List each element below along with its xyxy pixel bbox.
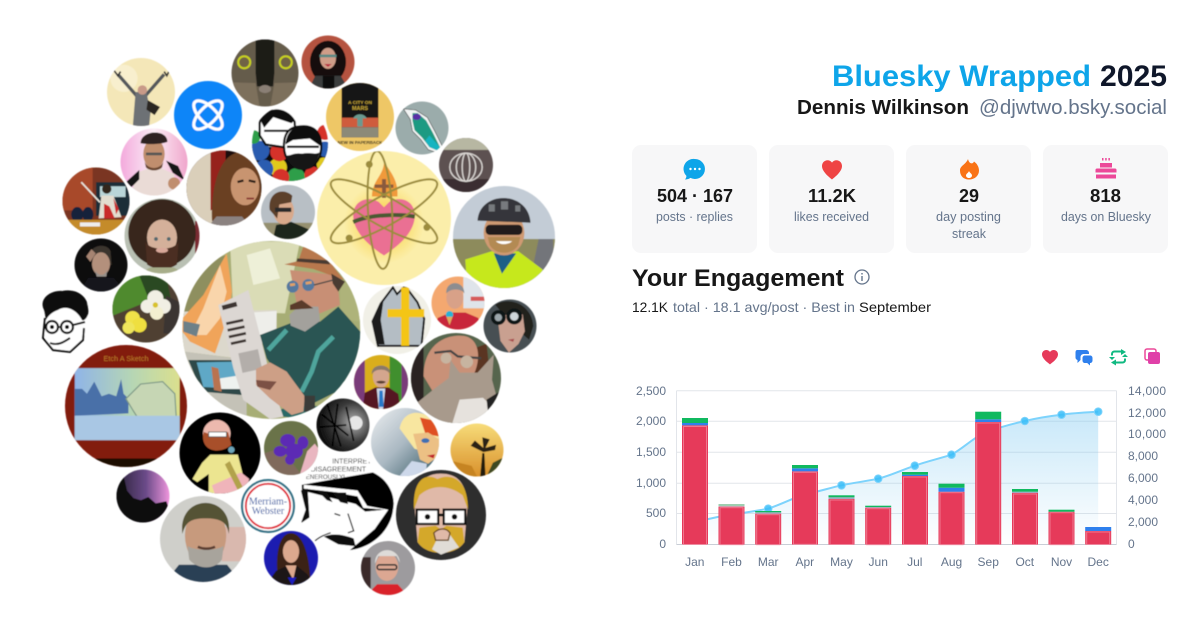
bars: likes bbox=[682, 422, 1111, 544]
right axis labels: 8,000 bbox=[1128, 449, 1158, 463]
panel: likes received stat: likes received bbox=[794, 210, 869, 224]
right axis labels: 4,000 bbox=[1128, 493, 1158, 507]
avatar: etched onion dome bbox=[439, 138, 493, 192]
avatar: etch-a-sketch drawing: Etch A Sketch bbox=[103, 354, 149, 363]
avatar: hummingbird sticker bbox=[396, 102, 448, 154]
panel: avatar bubble cluster bbox=[43, 36, 555, 595]
bars: likes inner highlight bbox=[684, 423, 1110, 545]
avatar: bishop mitre with yellow cross bbox=[363, 286, 431, 354]
avatar: Merriam-Webster logo: Merriam- bbox=[249, 496, 287, 507]
panel: day posting streak stat: 29 bbox=[959, 186, 979, 206]
left axis labels: 500 bbox=[646, 506, 666, 520]
bars: replies bbox=[682, 419, 1111, 531]
month labels: Jul bbox=[907, 555, 922, 569]
avatar: man with ice cream bbox=[432, 276, 484, 330]
avatar: sacred heart with atom orbits bbox=[317, 150, 451, 285]
text block: user name and handle: @djwtwo.bsky.social bbox=[979, 97, 1167, 119]
avatar: samurai kimono scene bbox=[62, 168, 130, 236]
left axis labels: 0 bbox=[659, 537, 666, 551]
avatar: black and white comic panel bbox=[298, 456, 394, 552]
panel: likes received stat bbox=[769, 145, 894, 253]
panel: likes received stat: 11.2K bbox=[808, 186, 856, 206]
panel: days on Bluesky stat: 818 bbox=[1090, 186, 1121, 206]
text block: engagement summary: total · 18.1 avg/post · Best in bbox=[673, 299, 855, 315]
line points bbox=[764, 408, 1102, 512]
icon: reposts arrows bbox=[1112, 352, 1125, 362]
icon: likes heart bbox=[1042, 350, 1058, 364]
chart: engagement bars and cumulative line bbox=[636, 384, 1166, 569]
avatar: woman on blue background bbox=[264, 531, 318, 585]
title: Bluesky Wrapped 2025: 2025 bbox=[1100, 60, 1167, 93]
icon: arrowheads bbox=[1109, 349, 1128, 366]
panel: day posting streak stat bbox=[906, 145, 1031, 253]
month labels: Apr bbox=[795, 555, 814, 569]
avatar: woman against brick wall bbox=[302, 36, 354, 88]
avatar: violets in a hand bbox=[264, 421, 318, 475]
panel: days on Bluesky stat: days on Bluesky bbox=[1061, 210, 1152, 224]
avatar: two cartoon bearded men with coloured balls bbox=[251, 108, 329, 182]
avatar: moon through dark branches bbox=[316, 398, 370, 452]
avatar: woman with raised arms bbox=[107, 58, 175, 126]
text block: user name and handle bbox=[797, 97, 1167, 119]
right axis labels: 6,000 bbox=[1128, 471, 1158, 485]
month labels: Jun bbox=[869, 555, 888, 569]
legend: chart series icons bbox=[1042, 349, 1160, 366]
avatar: main profile photo, man reading a burning newspaper bbox=[182, 241, 360, 419]
avatar: aurora over forest bbox=[116, 470, 170, 522]
text block: engagement summary: 12.1K bbox=[632, 299, 669, 315]
icon: info bbox=[855, 270, 869, 284]
right axis labels: 0 bbox=[1128, 537, 1135, 551]
cumulative area bbox=[695, 412, 1098, 544]
avatar: Merriam-Webster logo bbox=[241, 479, 295, 533]
left axis labels: 1,000 bbox=[636, 476, 666, 490]
avatar: book A City on Mars bbox=[326, 83, 394, 151]
avatar: Merriam-Webster logo: Webster bbox=[252, 506, 285, 517]
gridlines bbox=[676, 391, 1116, 544]
avatar: woman in big round sunglasses bbox=[484, 300, 536, 352]
avatar: cartoon man with glasses and yellow beard bbox=[396, 470, 486, 560]
avatar: man in red shirt with glasses bbox=[361, 541, 415, 595]
avatar: book A City on Mars: A CITY ON bbox=[348, 100, 372, 106]
avatar: black and white caricature bbox=[43, 290, 88, 352]
month labels: May bbox=[830, 555, 853, 569]
month labels: Sep bbox=[978, 555, 999, 569]
avatar: palm tree at sunset bbox=[450, 424, 504, 476]
bars: reposts bbox=[682, 412, 1074, 512]
avatar: older man in black bbox=[74, 238, 128, 292]
left axis labels: 2,000 bbox=[636, 414, 666, 428]
avatar: cyclist in neon jacket bbox=[453, 186, 555, 288]
right axis labels bbox=[1128, 384, 1166, 551]
avatar: man in flat cap with crows bbox=[120, 128, 188, 196]
text block: engagement summary: September bbox=[859, 299, 931, 315]
avatar: bluesky atom logo bbox=[174, 81, 242, 149]
month labels: Jan bbox=[685, 555, 704, 569]
avatar: black cat with yellow eyes bbox=[232, 40, 298, 106]
avatar: white and yellow flowers bbox=[112, 276, 180, 342]
month labels: Oct bbox=[1015, 555, 1035, 569]
panel: day posting streak stat: streak bbox=[952, 227, 987, 241]
right axis labels: 12,000 bbox=[1128, 406, 1166, 420]
right axis labels: 2,000 bbox=[1128, 515, 1158, 529]
heading: Your Engagement: Your Engagement bbox=[632, 265, 844, 292]
left axis labels: 2,500 bbox=[636, 384, 666, 398]
avatar: book A City on Mars: MARS bbox=[352, 106, 368, 112]
left axis labels: 1,500 bbox=[636, 445, 666, 459]
right axis labels: 10,000 bbox=[1128, 427, 1166, 441]
icon: chat bubble bbox=[684, 159, 705, 179]
avatar: cartoon bald man with ginger beard bbox=[180, 412, 260, 495]
icon: replies chat bubbles bbox=[1076, 350, 1092, 366]
avatar: smiling man in knit beanie bbox=[160, 496, 246, 582]
month labels: Dec bbox=[1088, 555, 1109, 569]
avatar: man with glasses looking away bbox=[261, 185, 315, 239]
avatar: black and white comic panel: DISAGREEMENT bbox=[311, 466, 367, 473]
avatar: etch-a-sketch drawing bbox=[65, 345, 187, 468]
month labels: Mar bbox=[758, 555, 779, 569]
avatar: man with moustache in maroon suit bbox=[354, 355, 408, 409]
text block: engagement summary bbox=[632, 299, 931, 315]
avatar: man with grey tabby cat bbox=[411, 333, 501, 423]
right axis labels: 14,000 bbox=[1128, 384, 1166, 398]
month labels: Aug bbox=[941, 555, 962, 569]
month labels: Nov bbox=[1051, 555, 1072, 569]
panel: days on Bluesky stat bbox=[1043, 145, 1168, 253]
icon: flame bbox=[960, 159, 979, 180]
panel: posts and replies stat bbox=[632, 145, 757, 253]
panel: day posting streak stat: day posting bbox=[936, 210, 1001, 224]
text block: user name and handle: Dennis Wilkinson bbox=[797, 97, 969, 119]
icon: heart bbox=[822, 160, 842, 180]
month labels bbox=[685, 555, 1109, 569]
left axis labels bbox=[636, 384, 666, 551]
month labels: Feb bbox=[721, 555, 742, 569]
avatar: book A City on Mars: NEW IN PAPERBACK bbox=[338, 140, 383, 145]
cumulative line bbox=[695, 412, 1098, 522]
panel: posts and replies stat: posts · replies bbox=[656, 210, 733, 224]
avatar: cartoon redhead with blonde feathers bbox=[371, 408, 439, 476]
avatar: black and white comic panel: GENEROUSLY! bbox=[301, 474, 345, 481]
title: Bluesky Wrapped 2025: Bluesky Wrapped bbox=[832, 60, 1091, 93]
icon: quotes copy squares bbox=[1145, 349, 1160, 364]
avatar: black and white comic panel: INTERPRET bbox=[332, 459, 372, 466]
avatar: woman with brown hair bbox=[186, 150, 262, 226]
avatar: man with curly hair and beard bbox=[124, 198, 200, 274]
icon: birthday cake bbox=[1096, 158, 1116, 178]
panel: posts and replies stat: 504 · 167 bbox=[657, 186, 733, 206]
